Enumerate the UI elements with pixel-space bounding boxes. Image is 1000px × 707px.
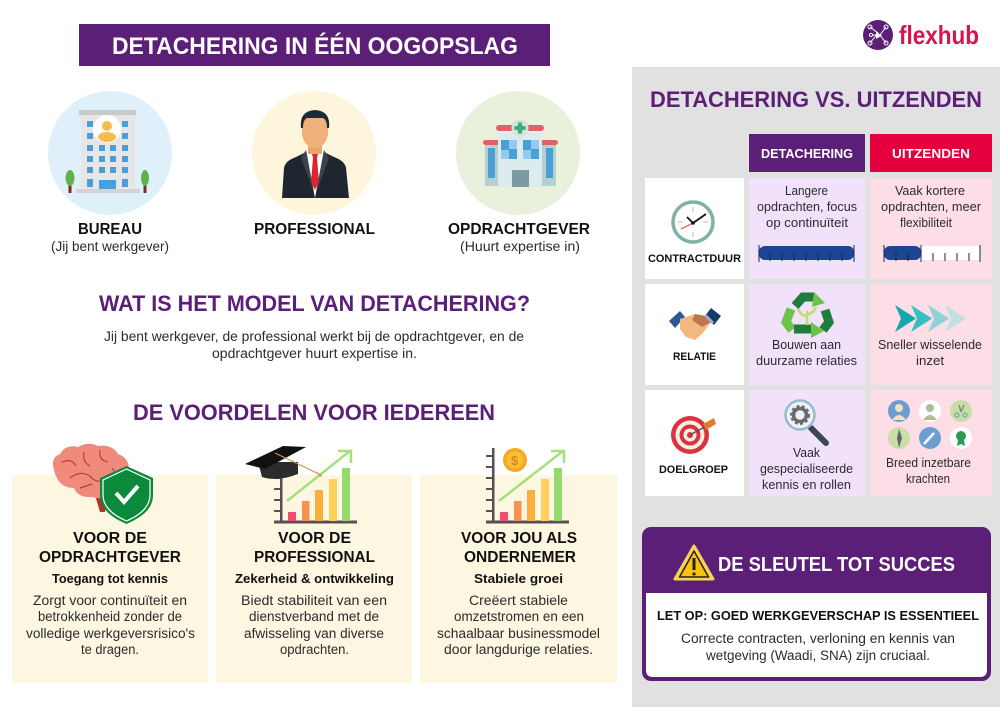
heading: card 3 (461, 530, 577, 566)
row label: contractduur: CONTRACTDUUR (648, 253, 741, 265)
icon: recycling with sprout (786, 292, 829, 338)
row label: relatie: RELATIE (673, 351, 716, 363)
callout body: Correcte contracten, verloning en kennis van (681, 631, 955, 646)
body: card 1: te dragen. (81, 642, 139, 657)
paragraph: model: opdrachtgever huurt expertise in. (212, 346, 417, 361)
cell: detachering contractduur: opdrachten, focus (757, 199, 857, 214)
progress bar: short (884, 245, 980, 262)
cell: uitzenden doelgroep: Breed inzetbare (886, 455, 971, 470)
body: card 1: Zorgt voor continuïteit en (33, 593, 187, 608)
flexhub logo: flexhub (899, 20, 979, 50)
body: card 2 (241, 593, 387, 657)
cell: detachering relatie (749, 284, 865, 385)
callout body: wetgeving (Waadi, SNA) zijn cruciaal. (705, 648, 930, 663)
section: bureau (48, 91, 172, 254)
icon: warning triangle (675, 546, 713, 579)
label: bureau: BUREAU (78, 221, 142, 238)
heading: card 1: VOOR DE (73, 530, 147, 547)
row label: doelgroep: DOELGROEP (659, 464, 728, 476)
paragraph: model (104, 329, 524, 361)
cell: uitzenden contractduur: opdrachten, meer (881, 199, 982, 214)
cell: detachering doelgroep: gespecialiseerde (760, 461, 853, 476)
icon: target (671, 416, 716, 454)
body: card 3: omzetstromen en een (454, 609, 584, 624)
column header: uitzenden (870, 134, 992, 172)
cell: uitzenden doelgroep: krachten (906, 471, 950, 486)
cell: detachering contractduur (749, 178, 865, 279)
callout subheading: LET OP: GOED WERKGEVERSCHAP IS ESSENTIEEL (657, 608, 979, 623)
title banner (79, 24, 550, 66)
progress bar: long (759, 245, 854, 262)
cell: uitzenden doelgroep (870, 390, 992, 496)
row label: contractduur (645, 178, 744, 279)
icon: professional in suit (252, 91, 376, 215)
body: card 2: afwisseling van diverse (244, 626, 384, 641)
icon: coin with growth chart (486, 448, 569, 524)
row label: doelgroep (645, 390, 744, 496)
column header: uitzenden: UITZENDEN (892, 146, 970, 161)
body: card 1: volledige werkgeversrisico's (26, 626, 195, 641)
panel: detachering vs uitzenden (632, 67, 1000, 707)
section: opdrachtgever (448, 91, 590, 254)
label: opdrachtgever: OPDRACHTGEVER (448, 221, 590, 238)
cell: uitzenden relatie: inzet (916, 353, 944, 368)
heading: card 2 (254, 530, 375, 566)
cell: detachering contractduur: op continuïteit (766, 215, 848, 230)
body: card 2: Biedt stabiliteit van een (241, 593, 387, 608)
callout body (681, 631, 955, 663)
heading: card 1: OPDRACHTGEVER (39, 549, 181, 566)
cell: uitzenden relatie: Sneller wisselende (878, 337, 982, 352)
body: card 1 (26, 593, 195, 657)
subheading: card 2: Zekerheid & ontwikkeling (235, 571, 394, 586)
body: card 3 (437, 593, 600, 657)
flexhub logo (863, 20, 979, 50)
icon: clock (673, 202, 713, 242)
section: professional (252, 91, 376, 238)
icon: magnifier with gear (786, 400, 826, 443)
panel: voor jou als ondernemer (420, 448, 617, 683)
body: card 2: dienstverband met de (249, 609, 379, 624)
body: card 1: betrokkenheid zonder de (38, 609, 182, 624)
callout heading: DE SLEUTEL TOT SUCCES (718, 554, 955, 576)
cell: uitzenden relatie (870, 284, 992, 385)
icon: coin with growth chart: $ (511, 453, 519, 468)
panel: voor de opdrachtgever (12, 444, 208, 683)
subheading: card 3: Stabiele groei (474, 571, 563, 586)
heading: card 2: VOOR DE (278, 530, 351, 547)
icon: brain with shield (53, 444, 153, 524)
subheading: card 1: Toegang tot kennis (52, 571, 168, 586)
icon: handshake (669, 308, 721, 340)
heading: card 3: VOOR JOU ALS (461, 530, 577, 547)
cell: uitzenden contractduur: Vaak kortere (895, 183, 965, 198)
body: card 3: Creëert stabiele (469, 593, 568, 608)
heading: card 1 (39, 530, 181, 566)
icon: chevrons (895, 305, 966, 332)
cell: detachering relatie: duurzame relaties (756, 353, 857, 368)
sublabel: bureau: (Jij bent werkgever) (51, 239, 169, 254)
heading: model: WAT IS HET MODEL VAN DETACHERING? (99, 291, 530, 316)
sublabel: opdrachtgever: (Huurt expertise in) (460, 239, 580, 254)
icon: graduation cap with growth chart (245, 446, 357, 524)
column header: detachering (749, 134, 865, 172)
body: card 3: schaalbaar businessmodel (437, 626, 600, 641)
cell: detachering doelgroep: Vaak (793, 445, 821, 460)
heading: voordelen: DE VOORDELEN VOOR IEDEREEN (133, 400, 495, 425)
body: card 2: opdrachten. (280, 642, 349, 657)
row label: relatie (645, 284, 744, 385)
heading: card 3: ONDERNEMER (464, 549, 576, 566)
callout: de sleutel tot succes (642, 527, 991, 681)
icon: hospital (456, 91, 580, 215)
body: card 3: door langdurige relaties. (444, 642, 593, 657)
cell: detachering contractduur: Langere (785, 183, 828, 198)
label: professional: PROFESSIONAL (254, 221, 375, 238)
paragraph: model: Jij bent werkgever, de professional werkt bij de opdrachtgever, en de (104, 329, 524, 344)
title banner: DETACHERING IN ÉÉN OOGOPSLAG (112, 32, 518, 60)
cell: uitzenden contractduur: flexibiliteit (900, 215, 952, 230)
panel: voor de professional (216, 446, 412, 683)
icon: office building (48, 91, 172, 215)
column header: detachering: DETACHERING (761, 146, 853, 161)
heading: card 2: PROFESSIONAL (254, 549, 375, 566)
cell: detachering doelgroep: kennis en rollen (762, 477, 851, 492)
cell: detachering relatie: Bouwen aan (772, 337, 841, 352)
heading: comparison: DETACHERING VS. UITZENDEN (650, 87, 982, 112)
cell: uitzenden contractduur (870, 178, 992, 279)
cell: detachering doelgroep (749, 390, 865, 496)
icons: six professions (888, 400, 972, 449)
